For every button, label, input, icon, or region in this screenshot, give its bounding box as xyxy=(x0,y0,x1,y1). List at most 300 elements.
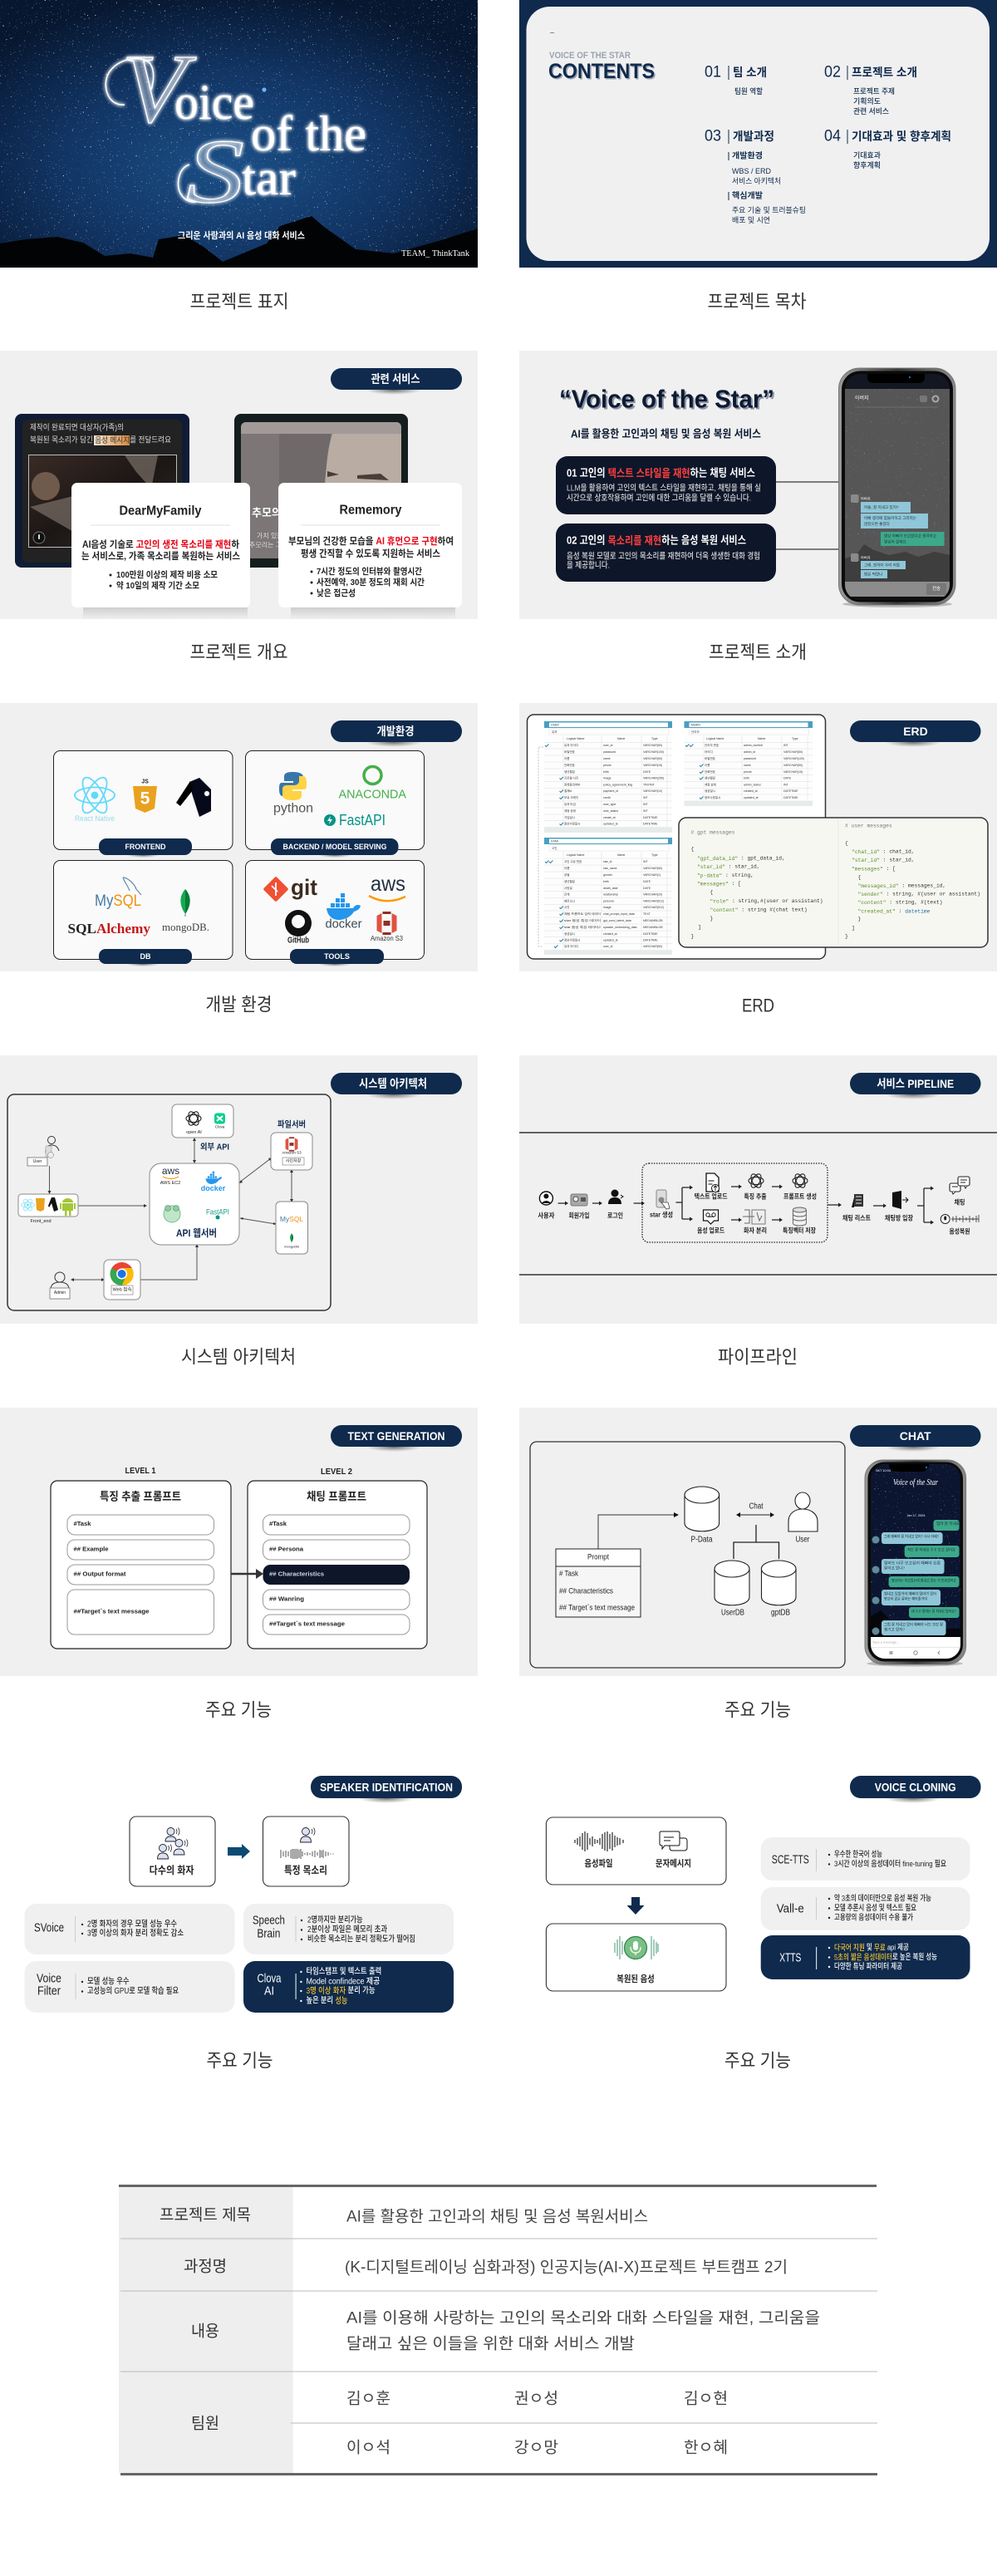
card: tools xyxy=(246,861,424,966)
front end box xyxy=(18,1194,78,1217)
icon: git: git xyxy=(291,875,317,900)
contents 03: 핵심개발 xyxy=(732,191,763,201)
service box 01: LLM을 활용하여 고인의 텍스트 스타일을 재현하고, 채팅을 통해 실 xyxy=(567,482,761,494)
label: db xyxy=(99,949,192,966)
step: chat list: 채팅 리스트 xyxy=(842,1213,872,1222)
code: gpt messages: "role" : string,#(user or assistant) xyxy=(710,898,823,904)
step: feature extraction: 특징 추출 xyxy=(744,1192,766,1200)
step: prompt creation xyxy=(783,1172,817,1200)
row: team members: 권ㅇ성 xyxy=(514,2390,558,2408)
contents heading: CONTENTS xyxy=(550,61,656,85)
phone mockup: 항상 아빠가 보고있다고 생각하고 xyxy=(884,533,936,538)
code: user messages: { xyxy=(857,874,861,881)
step: user xyxy=(538,1192,555,1220)
chat phone mockup: 엄마도 너무 보고싶어 예빠야 요즘 xyxy=(884,1561,941,1566)
step: enter chat room: 채팅방 입장 xyxy=(885,1213,914,1222)
icon: amazon s3: Amazon S3 xyxy=(371,934,403,942)
row: content: 달래고 싶은 이들을 위한 대화 서비스 개발 xyxy=(346,2335,635,2353)
cylinder: p-data: P-Data xyxy=(691,1536,713,1544)
chrome web box xyxy=(104,1260,140,1300)
option: svoice: 2명 화자의 경우 모델 성능 우수 xyxy=(87,1918,177,1930)
api web server box: docker xyxy=(201,1184,226,1192)
caption: project cover: 프로젝트 표지 xyxy=(189,291,289,312)
table: user: user_type xyxy=(603,803,616,806)
table: admin: DATETIME xyxy=(783,789,798,793)
table: star: 페르소나 xyxy=(564,899,576,902)
service box 01 xyxy=(556,456,776,514)
step: chat xyxy=(950,1177,970,1207)
level 2 prompt box: #Task xyxy=(269,1522,287,1527)
api web server box: AWS EC2 xyxy=(160,1181,180,1186)
option: voice filter xyxy=(25,1961,234,2013)
code: gpt messages: "gpt_data_id" : gpt_data_id, xyxy=(697,856,785,861)
table: admin: INT xyxy=(783,783,789,786)
label: tools: TOOLS xyxy=(324,952,350,961)
code: user messages: "messages" : [ xyxy=(852,866,896,872)
table: user: VARCHAR(10) xyxy=(643,789,662,793)
diagram frame xyxy=(530,1442,845,1668)
table: admin: 비밀번호 xyxy=(705,756,716,760)
table: user: 정보수정일시 xyxy=(564,821,580,826)
code: gpt messages: "star_id" : star_id, xyxy=(697,864,760,869)
table: star: 생년월일 xyxy=(564,879,575,883)
table: admin: birth xyxy=(744,776,749,779)
table: user: DATETIME xyxy=(643,823,658,826)
option: speech brain xyxy=(243,1904,454,1954)
table: admin: password xyxy=(744,757,756,760)
caption: project contents: 프로젝트 목차 xyxy=(708,291,806,312)
user figure: User xyxy=(33,1159,42,1164)
shadow: info cards xyxy=(83,607,248,619)
code: user messages: } xyxy=(845,934,848,939)
prompt to p-data arrow xyxy=(598,1512,679,1549)
table: star: 고인 고유 번호 xyxy=(564,859,582,863)
option: sce-tts: 우수한 한국어 성능 xyxy=(834,1850,882,1860)
option: xtts: 다국어 지원 및 무료 api 제공 xyxy=(834,1943,909,1953)
card: Rememory: 평생 간직할 수 있도록 지원하는 서비스 xyxy=(301,548,440,559)
table: user: VARCHAR(50) xyxy=(643,757,662,760)
table: star: 이름 xyxy=(564,866,570,870)
phone mockup: 않았으면 좋겠다 xyxy=(864,521,891,527)
icon: aws: aws xyxy=(371,873,405,896)
label: front end: Front_end xyxy=(30,1219,52,1224)
contents 01: 팀원 역할 xyxy=(734,86,763,96)
icon: mysql: MySQL xyxy=(95,892,141,909)
table: star: 유저 아이디 xyxy=(564,944,578,948)
code: user messages: "chat_id" : chat_id, xyxy=(852,849,915,854)
table: user xyxy=(544,721,672,833)
code: user messages: "created_at" : datetime xyxy=(857,908,931,914)
db connector xyxy=(734,1525,779,1559)
prompt class box: # Task xyxy=(559,1569,578,1579)
chat phone mockup: 네 ㅎㅎ 엄마는 잘 지내요 있어요? xyxy=(911,1609,956,1614)
table: star: chat_prompt_input_data xyxy=(603,912,635,916)
table: admin: admin_id xyxy=(744,750,755,754)
option: xtts: XTTS xyxy=(779,1951,801,1964)
panel: erd xyxy=(519,703,997,971)
table: star: created_at xyxy=(603,932,617,936)
chat phone mockup: SKT 10:04 xyxy=(876,1469,891,1472)
cover title: of the xyxy=(251,106,366,161)
contents 03: 주요 기술 및 트러블슈팅 xyxy=(732,205,806,214)
caption: project overview: 프로젝트 개요 xyxy=(189,642,287,663)
code: user messages: { xyxy=(845,841,848,846)
table: star: Logical Name xyxy=(567,853,584,857)
option: sce-tts: 3시간 이상의 음성데이터 fine-tuning 필요 xyxy=(834,1859,946,1869)
icon: anaconda: ANACONDA xyxy=(339,788,406,801)
box: multiple speakers xyxy=(130,1816,215,1886)
step: login xyxy=(607,1190,623,1220)
table: star: birth xyxy=(603,880,609,883)
table: star: relationship xyxy=(603,892,618,896)
panel: system architecture xyxy=(0,1055,478,1324)
box: inputs xyxy=(546,1817,726,1885)
table: admin: 생성일시 xyxy=(705,789,715,793)
pill heading xyxy=(850,1776,980,1798)
step: voice upload xyxy=(697,1210,725,1235)
caption: pipeline: 파이프라인 xyxy=(718,1346,798,1368)
panel: voice cloning xyxy=(546,1776,980,1991)
cover title: tar xyxy=(242,150,296,205)
icon: waveform xyxy=(575,1831,623,1851)
contents heading: VOICE OF THE STAR xyxy=(549,51,631,61)
panel: related services xyxy=(0,351,478,619)
chat phone mockup: 챙기고 있지? xyxy=(884,1627,905,1632)
caption: voice cloning: 주요 기능 xyxy=(724,2051,791,2071)
table: admin: 생년월일 xyxy=(705,776,715,779)
label: tools xyxy=(290,949,384,966)
step: star creation xyxy=(650,1190,673,1218)
option: xtts: 5초의 짧은 음성데이터로 높은 복원 성능 xyxy=(834,1952,937,1962)
prompt class box: ## Characteristics xyxy=(559,1587,613,1595)
table: star: Name xyxy=(617,853,625,857)
level 2 prompt box: ##Target`s text message xyxy=(269,1622,345,1627)
table: user: DATE xyxy=(643,770,651,774)
table: user: 생년월일 xyxy=(564,769,575,774)
icon: github: GitHub xyxy=(287,936,309,946)
option: clova ai: 3명 이상 화자 분리 가능 xyxy=(306,1984,376,1996)
label: backend: BACKEND / MODEL SERVING xyxy=(282,843,387,851)
table: user: phone xyxy=(603,764,611,767)
code: user messages: "content" : string, #(text) xyxy=(857,899,943,906)
table: admin: phone xyxy=(744,770,752,774)
api web server box: FastAPI xyxy=(206,1208,229,1217)
caption: chat: 주요 기능 xyxy=(724,1700,791,1720)
cylinder: user db xyxy=(715,1561,749,1617)
table: star: 정보수정일시 xyxy=(564,937,580,942)
contents 01: 팀 소개 xyxy=(733,66,767,79)
table: star: persona xyxy=(603,899,614,902)
screenshot: rememory: 가치 있는 xyxy=(257,532,283,540)
contents 02: 프로젝트 주제 xyxy=(853,86,895,96)
table: star: 관계 xyxy=(564,892,569,896)
arrow: speakers to voice xyxy=(228,1844,250,1859)
table: admin: admin_number xyxy=(744,744,764,747)
table: user: 유저 타입 xyxy=(564,802,576,806)
table: star: VARCHAR(20) xyxy=(643,892,662,896)
option: vall-e: 모델 추론시 음성 및 텍스트 필요 xyxy=(834,1903,916,1913)
cylinder: p-data xyxy=(685,1487,720,1544)
option: clova ai: 높은 분리 성능 xyxy=(306,1996,348,2006)
chat phone mockup xyxy=(865,1460,966,1667)
code: user messages: "sender" : string, #(user or assistant) xyxy=(857,891,980,897)
level 2 prompt box: ## Wanring xyxy=(269,1597,304,1602)
table: user: Type xyxy=(651,737,658,740)
icon: docker: docker xyxy=(326,917,362,931)
contents 03: 서비스 아키텍처 xyxy=(732,176,781,185)
table: user: 프로필 사진 xyxy=(564,776,578,779)
card: DearMyFamily xyxy=(71,483,250,607)
phone mockup xyxy=(839,368,955,607)
step: speaker separation: 화자 분리 xyxy=(744,1227,767,1235)
cylinder: gpt db: gptDB xyxy=(771,1609,790,1617)
card: backend xyxy=(246,751,424,858)
option: speech brain: 2분이상 파일은 메모리 초과 xyxy=(307,1924,387,1934)
row: team members: 김ㅇ현 xyxy=(684,2390,728,2408)
icon: fastapi: FastAPI xyxy=(339,812,386,828)
table: user: VARCHAR(100) xyxy=(643,750,664,754)
screenshot: dear my family: 제작이 완료되면 대상자(가족)의 xyxy=(30,424,124,432)
option: voice filter: 고성능의 GPU로 모델 학습 필요 xyxy=(87,1985,179,1996)
card: Rememory: 7시간 정도의 인터뷰와 촬영시간 xyxy=(317,566,422,577)
code: gpt messages: "messages" : [ xyxy=(697,881,741,887)
level 1 prompt box: 특징 추출 프롬프트 xyxy=(100,1491,181,1502)
pill heading: SPEAKER IDENTIFICATION xyxy=(320,1780,453,1793)
table: user: 이름 xyxy=(564,756,570,760)
icon: anaconda xyxy=(339,766,406,801)
step: enter chat room xyxy=(885,1191,914,1222)
table: star: 생성일시 xyxy=(564,932,575,936)
table: star: star_name xyxy=(603,867,617,870)
panel: dev environment xyxy=(0,703,478,971)
panel: chat xyxy=(519,1408,997,1676)
table: admin: VARCHAR(50) xyxy=(783,764,803,767)
contents 03: 개발환경 xyxy=(732,151,763,161)
external api box: open AI xyxy=(186,1130,202,1135)
phone mockup: 열심히 살게요 xyxy=(884,538,906,545)
chat phone mockup: 엄마 잘 지내요? xyxy=(936,1521,962,1526)
label: voice file: 음성파일 xyxy=(585,1857,613,1869)
table: admin: Logical Name xyxy=(706,737,724,740)
prompt class box xyxy=(556,1549,641,1617)
step: speaker separation xyxy=(743,1210,767,1235)
table: user: VARCHAR(255) xyxy=(643,776,664,779)
api web server box: aws xyxy=(162,1165,179,1177)
code: gpt messages xyxy=(691,829,823,939)
panel: project introduction xyxy=(519,351,997,619)
table: user: 비밀번호 xyxy=(564,750,576,754)
option: vall-e xyxy=(761,1887,970,1930)
step: voice restoration: 음성복원 xyxy=(949,1227,970,1235)
option: speech brain: Brain xyxy=(257,1926,280,1941)
phone mockup: 아들, 잘 지내고 있지? xyxy=(864,504,899,510)
code: gpt messages: { xyxy=(691,846,695,853)
table: user: credit xyxy=(603,796,611,799)
icon: mongodb: mongoDB. xyxy=(162,922,209,933)
option: clova ai: 타임스탬프 및 텍스트 출력 xyxy=(306,1966,381,1976)
code: gpt messages: { xyxy=(710,889,713,896)
table: user: 가입일시 xyxy=(564,815,575,819)
database box xyxy=(276,1202,307,1254)
step: star creation: star 생성 xyxy=(650,1210,673,1218)
label: text message: 문자메시지 xyxy=(656,1857,691,1869)
label: level 1: LEVEL 1 xyxy=(125,1466,156,1476)
service box 02 xyxy=(556,524,776,582)
label: external api: 외부 API xyxy=(200,1142,229,1152)
contents 04: 기대효과 xyxy=(853,150,881,160)
table: admin: INT xyxy=(783,744,789,747)
card: DearMyFamily: DearMyFamily xyxy=(120,504,202,519)
contents 04: 04 xyxy=(824,128,841,145)
pill heading xyxy=(850,720,980,742)
row: team members: 한ㅇ혜 xyxy=(684,2438,728,2456)
card: frontend xyxy=(53,751,233,858)
step: voice restoration xyxy=(941,1215,979,1235)
row: content xyxy=(191,2308,820,2353)
pill heading: 관련 서비스 xyxy=(371,372,420,386)
pill heading xyxy=(331,368,462,390)
table: star: star 음성 특징 데이터2 xyxy=(564,925,601,929)
step: chat list xyxy=(842,1194,872,1222)
contents 02: 관련 서비스 xyxy=(853,106,889,116)
chat phone mockup: 명상하는 하고있는데 힘내고 있는 거 모르겠어요 xyxy=(891,1577,956,1584)
phone mockup: 아빠 생각에 힘들어하고 그러지는 xyxy=(864,515,916,521)
step: login: 로그인 xyxy=(607,1212,623,1220)
table: star: gpt_cond_latent_data xyxy=(603,919,631,922)
panel: project cover xyxy=(0,0,478,268)
contents 03: 03 xyxy=(705,128,721,145)
contents 04: 향후계획 xyxy=(853,160,881,170)
panel: speaker identification xyxy=(25,1776,462,2013)
table: admin: 관리자 xyxy=(691,730,700,734)
phone mockup: 밥은 먹었니 xyxy=(864,572,882,577)
table: star: DATETIME xyxy=(643,932,658,936)
team name: TEAM_ ThinkTank xyxy=(401,248,469,258)
contents 03: 배포 및 시연 xyxy=(732,215,770,224)
table: star: DATE xyxy=(643,880,651,883)
table: user: 유저 아이디 xyxy=(564,743,578,747)
table: user: VARCHAR(15) xyxy=(643,764,662,767)
table: user: INT xyxy=(643,796,648,799)
s3 box: Amazon S3 xyxy=(282,1150,302,1155)
option: sce-tts xyxy=(761,1837,970,1880)
table: star: Type xyxy=(651,853,658,857)
pill heading: ERD xyxy=(903,725,928,738)
option: vall-e: 고용량의 음성데이터 수용 불가 xyxy=(834,1913,913,1923)
table: admin: 관리자 번호 xyxy=(705,743,720,747)
table: user: image xyxy=(603,776,611,779)
row: team members: 이ㅇ석 xyxy=(346,2438,390,2456)
pill heading: CHAT xyxy=(900,1429,931,1443)
row: team members: 팀원 xyxy=(191,2415,219,2433)
step arrows xyxy=(558,1185,934,1225)
table: user: INT xyxy=(643,809,648,813)
api web server box: API 웹서버 xyxy=(176,1227,217,1239)
arrows xyxy=(48,1138,293,1281)
service box 02: 을 제공합니다. xyxy=(567,560,610,570)
card: Rememory: 부모님의 건강한 모습을 AI 휴먼으로 구현하여 xyxy=(288,535,454,547)
chat phone mockup: 잘하고 있니? xyxy=(884,1566,905,1571)
pill heading xyxy=(331,720,462,742)
option: voice filter: 모델 성능 우수 xyxy=(87,1976,130,1986)
option: vall-e: 약 3초의 데이터만으로 음성 복원 가능 xyxy=(834,1893,931,1903)
table: star: 성별 xyxy=(564,873,569,877)
contents heading xyxy=(548,30,656,85)
pill heading xyxy=(850,1073,980,1094)
icon: fastapi xyxy=(324,812,386,828)
cover title: V xyxy=(121,34,197,143)
option: clova ai: AI xyxy=(264,1984,274,1998)
caption: speaker identification: 주요 기능 xyxy=(206,2051,273,2071)
table: admin: Type xyxy=(792,737,798,740)
icon: html shield: 5 xyxy=(140,789,150,808)
table: user: updated_at xyxy=(603,823,618,826)
option: voice filter: Filter xyxy=(37,1984,61,1998)
table: star: user_id xyxy=(603,945,613,948)
pill heading: TEXT GENERATION xyxy=(347,1429,445,1443)
code: gpt messages: } xyxy=(710,916,713,922)
caption: text generation: 주요 기능 xyxy=(205,1700,272,1720)
contents 04: 기대효과 및 향후계획 xyxy=(852,130,951,143)
contents heading: CONTENTS xyxy=(548,60,655,83)
row: course name xyxy=(184,2257,788,2277)
code: user messages: "messages_id" : messages_id, xyxy=(857,882,945,889)
connector lines xyxy=(776,482,839,549)
option: speech brain: 2명까지만 분리가능 xyxy=(307,1915,363,1925)
icon: docker xyxy=(326,893,362,931)
pill heading xyxy=(311,1776,462,1798)
card: DearMyFamily: 약 10일의 제작 기간 소모 xyxy=(116,580,199,591)
table: user: 전화번호 xyxy=(564,763,576,767)
chat phone mockup: Voice of the Star xyxy=(893,1477,939,1487)
card: DearMyFamily: 는 서비스로, 가족 목소리를 복원하는 서비스 xyxy=(81,550,240,562)
table: user: VARCHAR(50) xyxy=(643,744,662,747)
pill heading xyxy=(331,1073,462,1094)
table: star: 사망일 xyxy=(564,886,572,890)
table: admin: Name xyxy=(758,737,765,740)
label: frontend xyxy=(99,838,192,858)
user figure xyxy=(788,1492,818,1544)
row: team members xyxy=(191,2390,728,2456)
table: star: death_date xyxy=(603,887,618,890)
panel: service pipeline xyxy=(519,1055,997,1324)
step: vector store: 특징벡터 저장 xyxy=(783,1227,817,1235)
contents 02: 02 xyxy=(824,63,841,81)
table: user: 결제id xyxy=(564,789,572,793)
option: speech brain: 비슷한 목소리는 분리 정확도가 떨어짐 xyxy=(307,1933,415,1944)
service box 01: 시간으로 상호작용하며 고인에 대한 그리움을 달랠 수 있습니다. xyxy=(567,492,751,504)
architecture frame xyxy=(7,1094,331,1310)
level 1 prompt box: ##Target`s text message xyxy=(73,1609,150,1615)
user figure xyxy=(27,1137,59,1166)
code: user messages: } xyxy=(857,916,861,922)
code: gpt messages: "p-data" : string, xyxy=(697,873,754,878)
phone mockup: 그래, 장하다 우리 아들 xyxy=(864,562,900,568)
card: Rememory: 사전예약, 30분 정도의 재회 시간 xyxy=(317,577,425,587)
pill heading: VOICE CLONING xyxy=(875,1780,956,1793)
row: content: 내용 xyxy=(191,2322,219,2340)
card: Rememory: Rememory xyxy=(339,504,402,517)
code: user messages: ] xyxy=(852,926,855,931)
card: db xyxy=(53,861,233,966)
table: star: speaker_embedding_data xyxy=(603,926,637,929)
phone mockup: 아버지 xyxy=(861,555,871,560)
cover title: S xyxy=(186,120,244,222)
table: star: VARCHAR(50) xyxy=(643,945,662,948)
table: user: 유저 xyxy=(552,730,557,734)
database box: mongoDB xyxy=(284,1245,299,1248)
caption: erd: ERD xyxy=(742,995,774,1015)
